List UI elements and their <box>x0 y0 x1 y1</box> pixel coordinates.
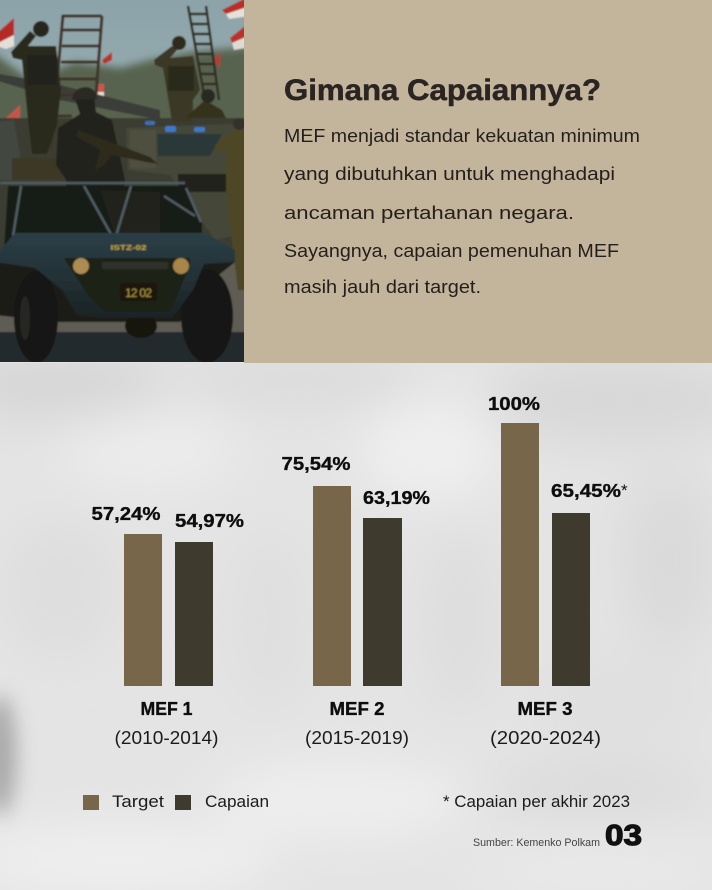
group: MEF 3: (2020-2024) <box>490 728 601 748</box>
legend: Capaian <box>205 792 269 811</box>
soldier at far right <box>215 130 244 290</box>
gunner <box>56 98 125 187</box>
roll cage <box>0 183 201 236</box>
text block: intro: MEF menjadi standar kekuatan minimum <box>284 125 640 146</box>
group: MEF 1: 57,24% <box>92 503 160 524</box>
group: MEF 1 <box>92 503 244 748</box>
group: MEF 2: 63,19% <box>363 487 430 508</box>
group: MEF 3: 100% <box>488 393 540 414</box>
lower chassis <box>0 262 235 322</box>
legend: Target <box>112 792 164 811</box>
group: MEF 1: 54,97% <box>175 510 244 531</box>
text block: intro <box>284 125 640 297</box>
group: MEF 2: 75,54% <box>282 453 350 474</box>
bar chart: MEF target vs capaian <box>92 393 628 748</box>
soldier left <box>11 21 61 154</box>
group: MEF 1: MEF 1 <box>140 699 192 719</box>
text block: intro: Sayangnya, capaian pemenuhan MEF <box>284 240 619 261</box>
text block: intro: yang dibutuhkan untuk menghadapi <box>284 163 615 184</box>
group: MEF 3: MEF 3 <box>518 699 572 719</box>
text block: intro: masih jauh dari target. <box>284 276 481 297</box>
ladder left <box>51 15 102 150</box>
value with footnote asterisk: * <box>621 481 628 500</box>
ladder right <box>188 6 219 100</box>
text block: intro: ancaman pertahanan negara. <box>284 202 574 223</box>
jeep body <box>0 233 235 318</box>
heading: Gimana Capaiannya? <box>284 74 601 107</box>
panel: photo of military parade: 12 02 <box>125 286 152 300</box>
panel: intro text background <box>244 0 712 363</box>
mid-ground <box>0 118 244 252</box>
plates: ISTZ-02 <box>110 245 147 252</box>
cannon barrels <box>0 73 160 120</box>
footnote: * Capaian per akhir 2023 <box>443 792 630 811</box>
background: smoke texture <box>0 350 712 890</box>
jeep roll cage interior <box>4 186 202 250</box>
source: Sumber: Kemenko Polkam <box>473 837 600 849</box>
panel: photo of military parade <box>0 0 244 362</box>
group: MEF 2 <box>282 453 430 748</box>
value with footnote asterisk: 65,45% <box>551 480 621 501</box>
trees <box>0 44 244 120</box>
group: MEF 1: (2010-2014) <box>114 728 218 748</box>
flags <box>0 18 14 44</box>
page number: 03 <box>605 820 642 852</box>
group: MEF 2: MEF 2 <box>330 699 384 719</box>
group: MEF 2: (2015-2019) <box>305 728 409 748</box>
truck behind <box>127 125 234 238</box>
legend <box>83 792 269 811</box>
headlights <box>73 258 89 274</box>
soldier right <box>154 36 200 122</box>
road <box>0 262 244 334</box>
tyres <box>14 316 58 362</box>
group: MEF 3 <box>488 393 628 748</box>
